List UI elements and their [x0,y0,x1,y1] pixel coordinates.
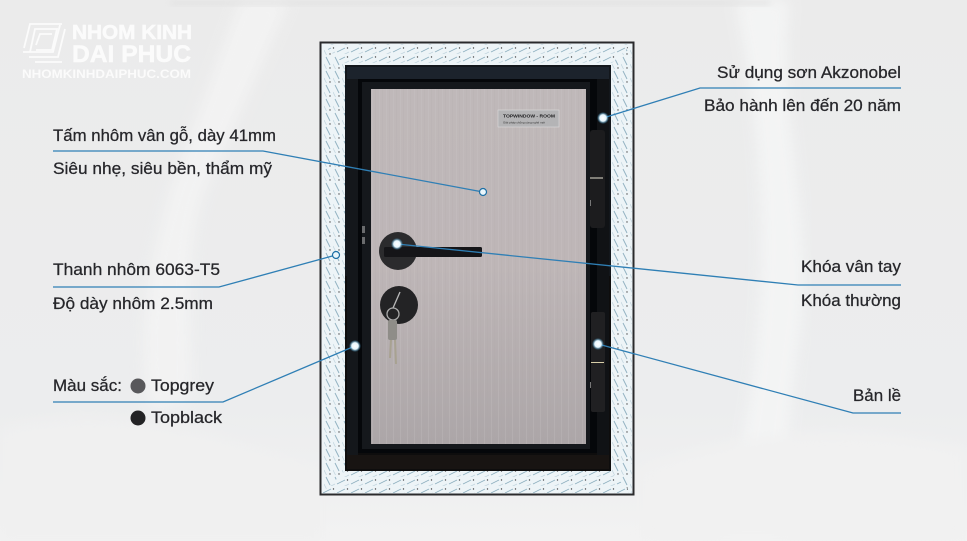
callout dots [332,112,609,352]
logo mark [23,24,65,62]
callout: colours: Topgrey [151,377,215,395]
logo url: NHOMKINHDAIPHUC.COM [22,67,191,81]
hinge lower [590,312,605,412]
swatch: topgrey [130,378,146,394]
hinge upper [590,130,605,228]
key lock [380,286,418,364]
callout: colours: Topblack [151,409,223,427]
logo [22,22,192,81]
callout: lock: Khóa thường [801,292,901,310]
callout: wood panel [53,126,276,178]
callout: lock [801,258,902,310]
callout: wood panel: Siêu nhẹ, siêu bền, thẩm mỹ [53,160,273,178]
callout: paint: Bảo hành lên đến 20 năm [704,97,901,115]
callout: aluminium bar: Độ dày nhôm 2.5mm [53,295,213,313]
logo: DAI PHUC [72,41,191,68]
brand plate: Giải pháp chống cùng nghệ mới [503,120,545,124]
brand plate: TOPWINDOW - ROOM [503,114,555,118]
protective film frame [320,42,634,494]
logo wordmark: NHOM KINH [72,22,192,44]
callout: hinge: Bản lề [853,387,901,405]
door handle [379,232,482,270]
callout: aluminium bar: Thanh nhôm 6063-T5 [53,261,220,279]
callout: wood panel: Tấm nhôm vân gỗ, dày 41mm [53,126,276,145]
callout lines [53,88,901,413]
wood grain panel [371,89,586,444]
swatch: topblack [130,410,146,426]
callout: aluminium bar [53,261,220,313]
callout: paint: Sử dụng sơn Akzonobel [717,64,901,82]
callout: colours [53,376,223,427]
door product image [320,42,634,494]
callout: lock: Khóa vân tay [801,258,902,276]
aluminium door frame [345,65,611,471]
brand plate [498,110,559,127]
callout: colours: Màu sắc: [53,376,122,395]
callout: paint [704,64,901,115]
